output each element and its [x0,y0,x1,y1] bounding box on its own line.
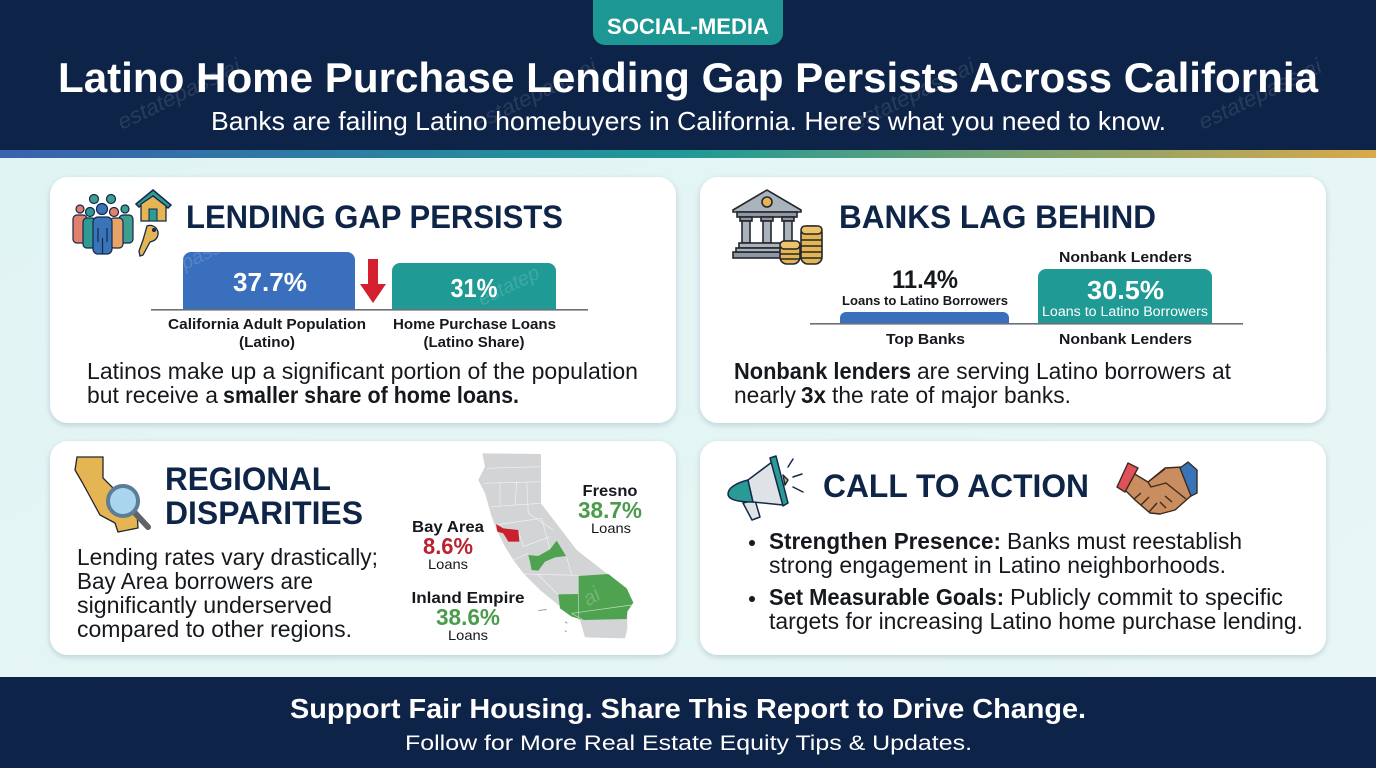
icon: megaphone [728,456,803,520]
category badge [593,0,783,45]
panel: call to action [700,441,1326,655]
arrow: down [360,259,386,303]
label: Inland Empire: 38.6% [436,604,500,630]
label: Inland Empire: Loans [448,627,488,643]
bullet: set measurable goals: Publicly commit to specific [1010,584,1283,610]
header banner: estatepass.ai [469,53,602,134]
bar chart: population versus loans: estatep [475,262,543,310]
header banner: estatepass.ai [113,53,246,134]
description: significantly underserved [77,592,332,618]
heading [165,461,363,531]
heading: REGIONAL [165,461,331,497]
panel: banks lag behind [700,177,1326,423]
bar chart: top banks versus nonbank lenders: 30.5% [1087,275,1164,305]
label: Fresno: Fresno [582,483,638,500]
subtitle: Banks are failing Latino homebuyers in California. Here's what you need to know. [211,106,1166,136]
heading: CALL TO ACTION [823,468,1089,504]
bar chart: population versus loans: 31% [450,273,498,303]
bar chart: top banks versus nonbank lenders: Nonbank Lenders [1059,331,1192,348]
description: Lending rates vary drastically; [77,544,378,570]
bar chart: population versus loans: (Latino) [239,334,295,351]
bullet: strengthen presence: Strengthen Presence: [769,528,1001,554]
description: Nonbank lenders [734,358,911,384]
bar chart: top banks versus nonbank lenders: Loans to Latino Borrowers [1042,304,1208,319]
description: are serving Latino borrowers at [917,358,1232,384]
bullet: strengthen presence [749,528,1242,578]
label: Bay Area: 8.6% [423,533,473,559]
label: Fresno: Loans [591,520,631,536]
category badge: SOCIAL-MEDIA [607,14,769,39]
description [77,544,378,642]
description: smaller share of home loans. [223,382,519,408]
label: Inland Empire [412,590,525,643]
description: 3x [801,382,826,408]
bar chart: population versus loans: pass [177,236,225,275]
bar chart: population versus loans: (Latino Share) [424,334,525,351]
label: Bay Area: Loans [428,556,468,572]
bar chart: top banks versus nonbank lenders: Nonbank Lenders [1059,249,1192,266]
bar chart: top banks versus nonbank lenders: Top Banks [886,331,965,348]
icon: California with magnifier [75,457,148,532]
bullet: strengthen presence: strong engagement in Latino neighborhoods. [769,552,1226,578]
header banner [0,0,1376,158]
icon: handshake [1117,462,1197,514]
description: compared to other regions. [77,616,352,642]
description: but receive a [87,382,218,408]
bar chart: top banks versus nonbank lenders: Loans to Latino Borrowers [842,293,1008,308]
bar chart: population versus loans [151,236,588,351]
description [87,358,638,408]
description [734,358,1232,408]
description: Latinos make up a significant portion of the population [87,358,638,384]
map: California regions [478,453,633,638]
bullet: set measurable goals [749,584,1303,634]
label: Bay Area [412,519,484,572]
label: Bay Area: Bay Area [412,519,484,536]
bullet: set measurable goals: Set Measurable Goals: [769,584,1004,610]
bar chart: top banks versus nonbank lenders [810,249,1243,348]
footer headline: Support Fair Housing. Share This Report to Drive Change. [290,693,1086,724]
panel: lending gap persists [50,177,676,423]
description: Bay Area borrowers are [77,568,313,594]
footer subline: Follow for More Real Estate Equity Tips & Updates. [405,732,972,755]
bar chart: population versus loans: 37.7% [233,267,307,297]
bar chart: top banks versus nonbank lenders: 11.4% [892,266,958,294]
label: Fresno: 38.7% [578,497,642,523]
heading: DISPARITIES [165,495,363,531]
bar chart: population versus loans: Home Purchase Loans [393,316,556,333]
header banner: estatepass.ai [1194,53,1327,134]
label: Inland Empire: Inland Empire [412,590,525,607]
icon: community and house key [73,190,171,256]
description: the rate of major banks. [832,382,1071,408]
icon: bank and coins [733,190,822,264]
bullet: set measurable goals: targets for increasing Latino home purchase lending. [769,608,1303,634]
header banner: estatepass.ai [847,53,980,134]
heading: LENDING GAP PERSISTS [186,199,563,235]
bar chart: population versus loans: California Adult Population [168,316,366,333]
heading: BANKS LAG BEHIND [839,199,1156,235]
panel: regional disparities [50,441,676,655]
bullet: strengthen presence: Banks must reestablish [1007,528,1242,554]
footer banner [0,677,1376,768]
map: California regions: ai [579,582,606,611]
label: Fresno [578,483,642,536]
title: Latino Home Purchase Lending Gap Persists Across California [58,54,1319,101]
description: nearly [734,382,796,408]
